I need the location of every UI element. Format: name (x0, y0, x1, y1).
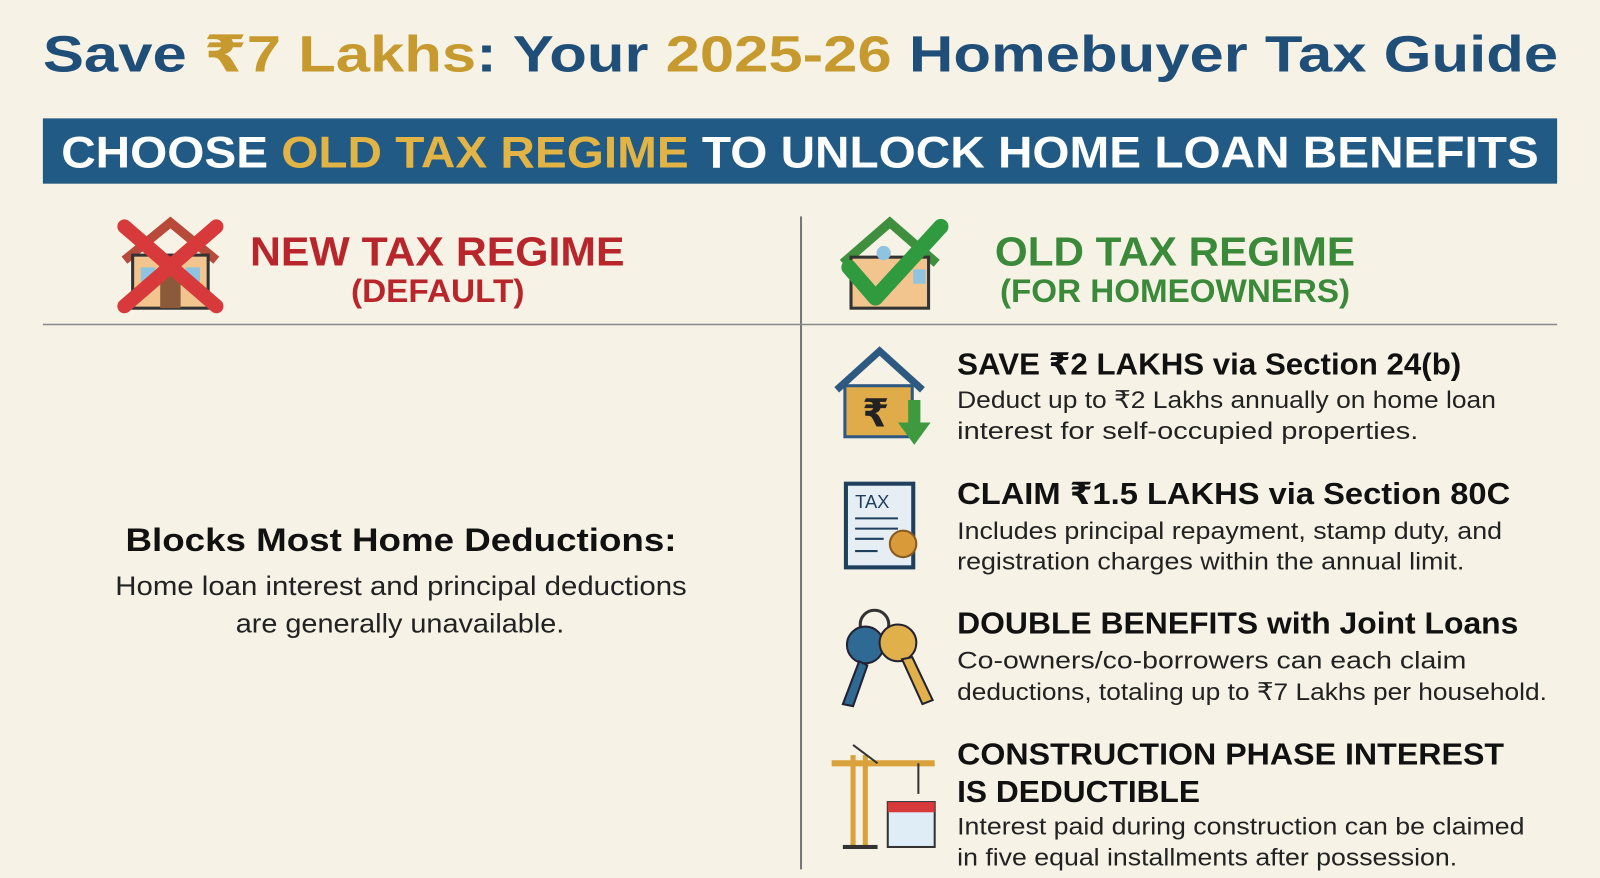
heading: old tax regime (995, 228, 1355, 309)
item: joint loans: DOUBLE BENEFITS with Joint Loans (957, 607, 1518, 641)
icon: house with green check (843, 222, 941, 308)
banner: CHOOSE OLD TAX REGIME TO UNLOCK HOME LOAN BENEFITS (61, 126, 1539, 177)
icon: tax document: TAX (855, 491, 889, 512)
text block: blocks deductions: are generally unavailable. (236, 609, 564, 639)
icon: tax document (846, 484, 916, 567)
item: construction: in five equal installments after possession. (957, 844, 1457, 871)
panel: old tax regime (832, 222, 1547, 871)
panel: new tax regime (115, 222, 687, 639)
item: joint loans: Co-owners/co-borrowers can each claim (957, 647, 1466, 674)
item: section 24b: SAVE ₹2 LAKHS via Section 24(b) (957, 348, 1461, 382)
item: joint loans (843, 607, 1547, 706)
item: section 80c: Includes principal repayment, stamp duty, and (957, 518, 1502, 545)
item: construction: IS DEDUCTIBLE (957, 775, 1200, 809)
item: construction: CONSTRUCTION PHASE INTEREST (957, 737, 1504, 771)
item: section 80c (846, 477, 1510, 575)
text block: blocks deductions: Home loan interest and principal deductions (115, 571, 687, 601)
heading: new tax regime (250, 228, 624, 309)
heading: new tax regime: NEW TAX REGIME (250, 228, 624, 274)
icon: house rupee: ₹ (862, 393, 889, 436)
item: section 24b: Deduct up to ₹2 Lakhs annually on home loan (957, 387, 1496, 414)
item: construction: Interest paid during construction can be claimed (957, 814, 1524, 841)
title: Save ₹7 Lakhs : Your 2025-26 Homebuyer Tax Guide (43, 25, 1558, 82)
item: section 80c: CLAIM ₹1.5 LAKHS via Section 80C (957, 477, 1510, 511)
icon: keys (843, 610, 933, 706)
item: section 24b: interest for self-occupied properties. (957, 418, 1418, 445)
icon: house rupee (837, 351, 931, 445)
text block: blocks deductions (115, 521, 687, 639)
item: section 80c: registration charges within the annual limit. (957, 548, 1464, 575)
item: construction (832, 737, 1524, 871)
icon: house with red cross (124, 222, 216, 308)
heading: new tax regime: (DEFAULT) (351, 272, 524, 309)
heading: old tax regime: OLD TAX REGIME (995, 228, 1355, 274)
item: section 24b (837, 348, 1496, 445)
heading: old tax regime: (FOR HOMEOWNERS) (1000, 272, 1350, 309)
text block: blocks deductions: Blocks Most Home Deductions: (126, 521, 677, 558)
item: joint loans: deductions, totaling up to ₹7 Lakhs per household. (957, 679, 1547, 706)
icon: crane with calendar (832, 745, 935, 849)
